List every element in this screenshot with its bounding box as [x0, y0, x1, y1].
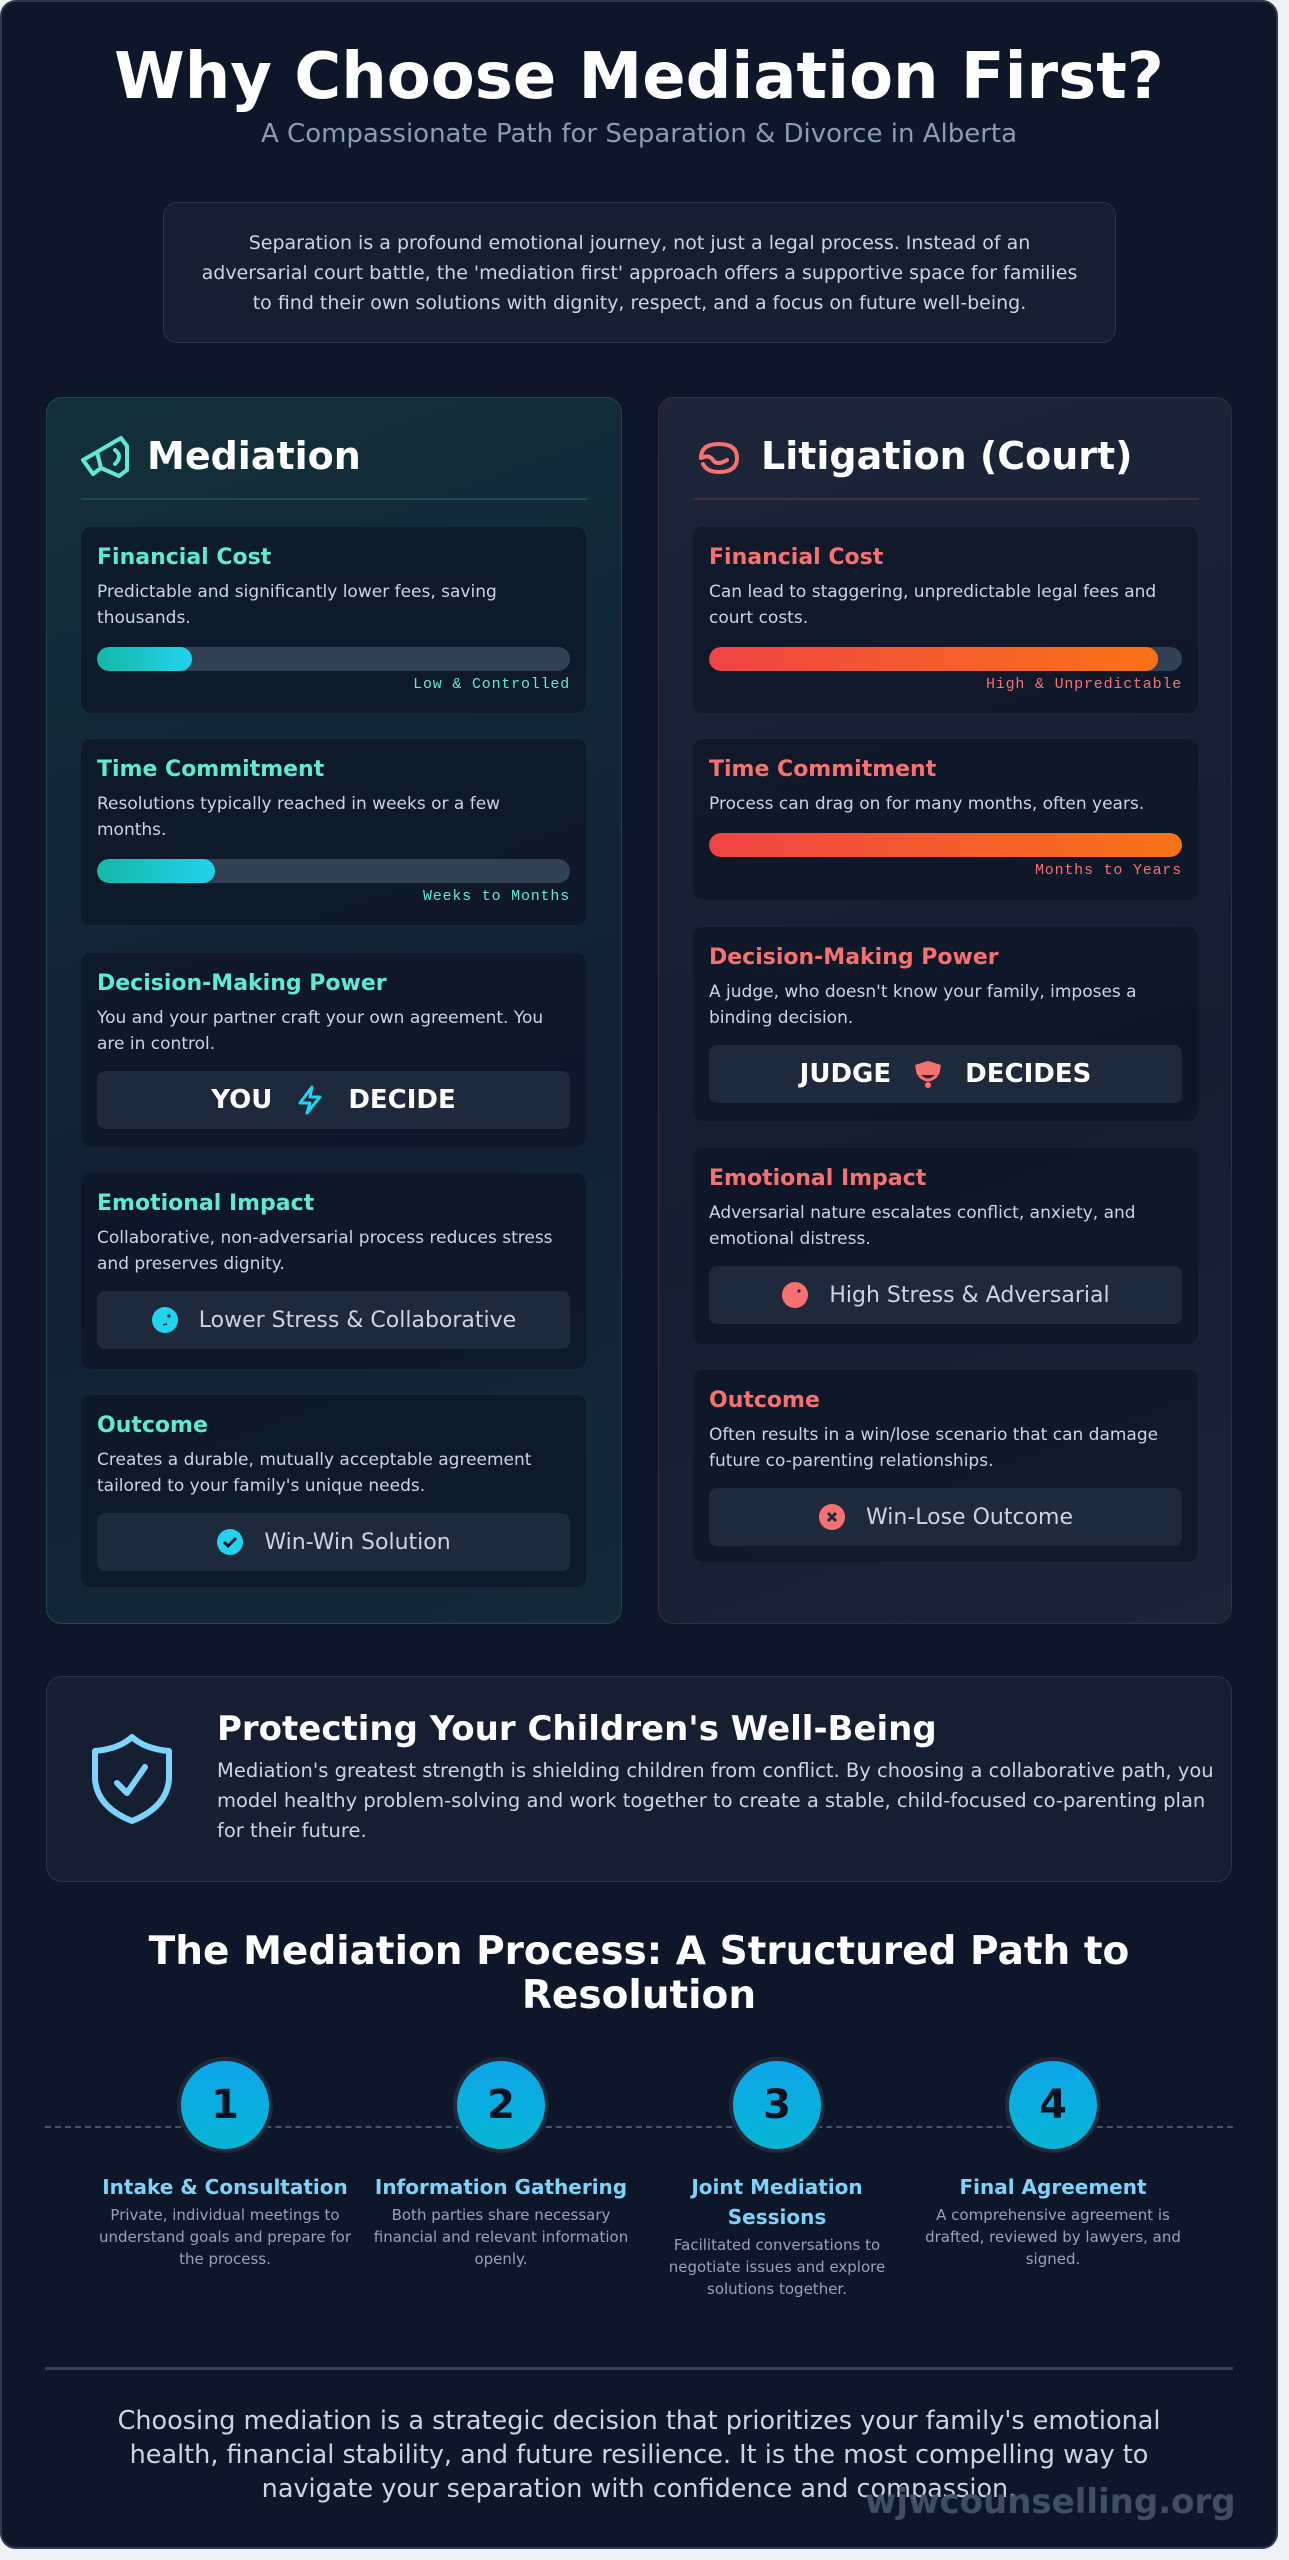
step 4: [925, 2057, 1181, 2268]
card: outcome: Outcome: [709, 1388, 820, 1413]
card: decision-making power: JUDGE DECIDES: [800, 1059, 1091, 1089]
panel: litigation: [658, 397, 1232, 1624]
intro text box: Separation is a profound emotional journey, not just a legal process. Instead of an adversarial court battle, the 'mediation first' approach offers a supportive space for families to find their own solutions with dignity, respect, and a focus on future well-being.: [202, 232, 1077, 314]
step 2: 2: [487, 2082, 515, 2128]
panel: children's well-being: [46, 1676, 1232, 1882]
card: decision-making power: YOU DECIDE: [211, 1085, 456, 1115]
intro text box: [163, 202, 1116, 343]
panel: mediation: [46, 397, 622, 1624]
card: emotional impact: Lower Stress & Collaborative: [199, 1308, 516, 1332]
step 2: [374, 2057, 628, 2268]
title: Why Choose Mediation First?: [114, 40, 1164, 114]
card: financial cost: Predictable and significantly lower fees, saving thousands.: [97, 582, 497, 628]
card: decision-making power: Decision-Making Power: [97, 971, 387, 996]
heading: litigation: Litigation (Court): [761, 434, 1133, 478]
step 2: Both parties share necessary financial and relevant information openly.: [374, 2206, 628, 2268]
card: financial cost: Financial Cost: [97, 545, 271, 570]
card: time commitment: Time Commitment: [709, 757, 936, 782]
card: financial cost: [693, 527, 1198, 713]
card: decision-making power: [81, 953, 586, 1147]
card: emotional impact: Adversarial nature escalates conflict, anxiety, and emotional distress.: [709, 1203, 1136, 1249]
card: time commitment: Months to Years: [1035, 862, 1182, 879]
card: outcome: Win-Win Solution: [264, 1530, 451, 1554]
card: time commitment: [81, 739, 586, 925]
step 1: 1: [211, 2082, 239, 2128]
card: emotional impact: Emotional Impact: [709, 1166, 926, 1191]
heading: mediation: Mediation: [147, 434, 361, 478]
watermark: wjwcounselling.org: [865, 2482, 1236, 2522]
card: time commitment: [693, 739, 1198, 900]
card: emotional impact: [81, 1173, 586, 1369]
step 4: A comprehensive agreement is drafted, reviewed by lawyers, and signed.: [925, 2206, 1181, 2268]
step 4: Final Agreement: [959, 2175, 1147, 2199]
card: time commitment: Process can drag on for many months, often years.: [709, 794, 1144, 814]
card: outcome: Win-Lose Outcome: [866, 1504, 1073, 1530]
card: emotional impact: Collaborative, non-adversarial process reduces stress and preserves dignity.: [97, 1228, 553, 1274]
step 2: Information Gathering: [375, 2175, 627, 2199]
card: outcome: [81, 1395, 586, 1587]
step 1: Private, individual meetings to understand goals and prepare for the process.: [99, 2206, 351, 2268]
card: outcome: Often results in a win/lose scenario that can damage future co-parenting relationships.: [709, 1425, 1158, 1471]
card: outcome: [693, 1370, 1198, 1562]
card: emotional impact: Emotional Impact: [97, 1191, 314, 1216]
card: decision-making power: Decision-Making Power: [709, 945, 999, 970]
card: financial cost: [81, 527, 586, 713]
card: emotional impact: High Stress & Adversarial: [829, 1282, 1110, 1308]
card: outcome: Outcome: [97, 1413, 208, 1438]
card: decision-making power: [693, 927, 1198, 1121]
step 3: [669, 2057, 885, 2298]
heading: mediation process: The Mediation Process: A Structured Path to Resolution: [149, 1929, 1129, 2018]
icon: litigation: [698, 442, 739, 474]
step 1: Intake & Consultation: [102, 2175, 348, 2199]
card: financial cost: High & Unpredictable: [986, 676, 1182, 693]
card: financial cost: Low & Controlled: [413, 676, 570, 693]
dashed timeline: [45, 2126, 1233, 2128]
step 3: Joint Mediation Sessions: [691, 2175, 863, 2229]
card: outcome: Creates a durable, mutually acceptable agreement tailored to your family's unique needs.: [97, 1450, 531, 1496]
card: decision-making power: You and your partner craft your own agreement. You are in control.: [97, 1008, 543, 1054]
card: financial cost: Financial Cost: [709, 545, 883, 570]
icon: megaphone: [80, 436, 129, 478]
card: time commitment: Resolutions typically reached in weeks or a few months.: [97, 794, 500, 840]
card: decision-making power: A judge, who doesn't know your family, imposes a binding decision.: [709, 982, 1137, 1028]
card: time commitment: Time Commitment: [97, 757, 324, 782]
step 4: 4: [1039, 2082, 1067, 2128]
step 3: Facilitated conversations to negotiate issues and explore solutions together.: [669, 2236, 885, 2298]
heading: protecting children: Protecting Your Children's Well-Being: [217, 1709, 937, 1749]
subtitle: A Compassionate Path for Separation & Divorce in Alberta: [261, 119, 1017, 149]
icon: shield: [92, 1734, 172, 1824]
card: financial cost: Can lead to staggering, unpredictable legal fees and court costs.: [709, 582, 1156, 628]
text: children: Mediation's greatest strength is shielding children from conflict. By choosing a collaborative path, you model healthy problem-solving and work together to create a stable, child-focused co-parenting plan for their future.: [217, 1759, 1214, 1842]
step 3: 3: [763, 2082, 791, 2128]
closing text: Choosing mediation is a strategic decision that prioritizes your family's emotional health, financial stability, and future resilience. It is the most compelling way to navigate your separation with confidence and compassion.: [118, 2406, 1160, 2504]
step 1: [99, 2057, 352, 2268]
card: time commitment: Weeks to Months: [423, 888, 570, 905]
card: emotional impact: [693, 1148, 1198, 1344]
